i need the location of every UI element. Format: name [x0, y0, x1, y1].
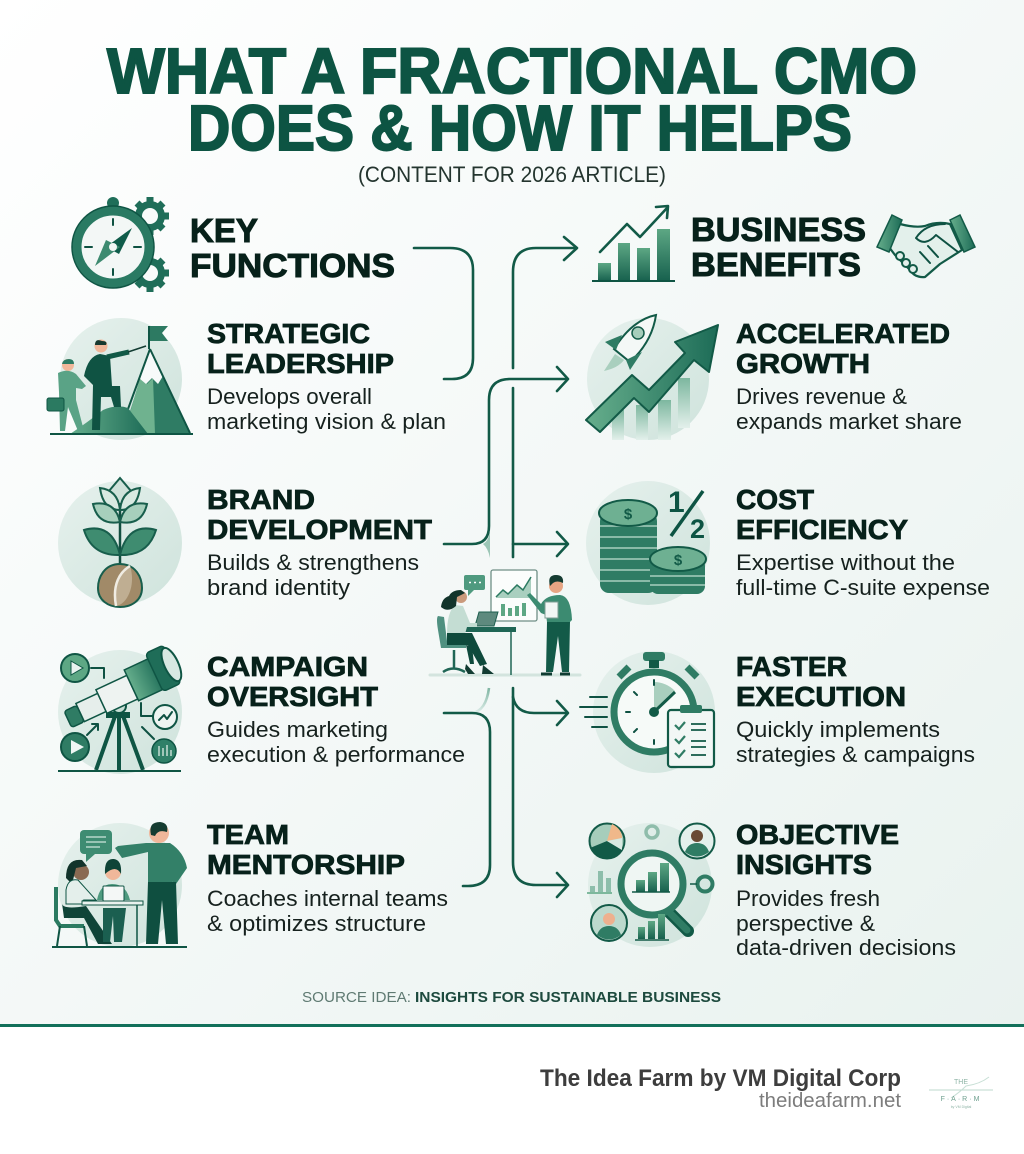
source line: INSIGHTS FOR SUSTAINABLE BUSINESS — [415, 990, 721, 1006]
description: expands market share — [736, 409, 962, 434]
description — [207, 717, 465, 767]
description: Coaches internal teams — [207, 886, 448, 911]
description — [736, 550, 990, 600]
heading: BRAND — [207, 484, 315, 515]
heading: OBJECTIVE — [736, 819, 899, 850]
heading: EXECUTION — [736, 681, 906, 712]
icon: rocket and rising arrow — [586, 315, 718, 440]
description: Drives revenue & — [736, 384, 907, 409]
panel: objective insights — [587, 819, 956, 960]
subtitle: (CONTENT FOR 2026 ARTICLE) — [358, 162, 666, 187]
icon: growth chart — [592, 206, 675, 281]
icon: stopwatch and checklist — [580, 651, 715, 773]
icon: coin stacks with one half: $ — [624, 506, 633, 523]
title: WHAT A FRACTIONAL CMO — [107, 35, 917, 107]
heading: OVERSIGHT — [207, 681, 378, 712]
heading: business benefits — [592, 206, 975, 283]
heading: TEAM — [207, 819, 289, 850]
description: Expertise without the — [736, 550, 955, 575]
footer brand text: The Idea Farm by VM Digital Corp — [540, 1065, 901, 1092]
panel: cost efficiency — [586, 481, 990, 605]
description — [207, 550, 419, 600]
description: Guides marketing — [207, 717, 388, 742]
heading text — [190, 212, 395, 284]
heading: MENTORSHIP — [207, 849, 405, 880]
panel: brand development — [58, 478, 432, 607]
flow connectors — [414, 237, 577, 897]
description: data-driven decisions — [736, 935, 956, 960]
description: full-time C-suite expense — [736, 575, 990, 600]
icon: magnifier and data — [587, 823, 714, 947]
title — [107, 35, 917, 164]
panel: team mentorship — [52, 819, 448, 947]
source line — [302, 990, 721, 1006]
heading — [736, 819, 899, 880]
description: execution & performance — [207, 742, 465, 767]
description: marketing vision & plan — [207, 409, 446, 434]
heading — [207, 318, 394, 379]
panel: accelerated growth — [586, 315, 962, 440]
heading: STRATEGIC — [207, 318, 370, 349]
heading — [207, 819, 405, 880]
icon: coin stacks with one half: 1 — [668, 486, 685, 519]
footer divider — [0, 1024, 1024, 1027]
description: brand identity — [207, 575, 350, 600]
heading text: BENEFITS — [691, 246, 861, 283]
footer logo: F·A·R·M — [941, 1096, 981, 1103]
heading text: KEY — [190, 212, 258, 249]
icon: coin stacks with one half: 2 — [690, 514, 705, 544]
description: Develops overall — [207, 384, 372, 409]
description — [736, 886, 956, 960]
center illustration: team at work — [430, 570, 580, 675]
footer brand text — [540, 1065, 901, 1112]
icon: coin stacks with one half — [586, 481, 710, 605]
heading: COST — [736, 484, 814, 515]
heading — [736, 318, 950, 379]
heading: DEVELOPMENT — [207, 514, 432, 545]
heading — [207, 651, 378, 712]
icon: mentor and team — [52, 822, 187, 947]
footer brand text: theideafarm.net — [759, 1090, 901, 1112]
description — [207, 384, 446, 434]
icon: climbing the mountain — [47, 318, 193, 440]
heading: CAMPAIGN — [207, 651, 368, 682]
heading: GROWTH — [736, 348, 870, 379]
heading: LEADERSHIP — [207, 348, 394, 379]
heading — [736, 651, 906, 712]
icon: compass with gears — [72, 197, 169, 292]
description — [736, 717, 975, 767]
heading: FASTER — [736, 651, 847, 682]
heading text — [691, 211, 866, 283]
footer logo — [929, 1077, 993, 1109]
heading: EFFICIENCY — [736, 514, 908, 545]
description: & optimizes structure — [207, 911, 426, 936]
heading text: BUSINESS — [691, 211, 866, 248]
source line: SOURCE IDEA: — [302, 990, 411, 1006]
description — [736, 384, 962, 434]
man presenting — [527, 575, 572, 674]
heading text: FUNCTIONS — [190, 247, 395, 284]
icon: handshake — [877, 215, 975, 277]
heading — [207, 484, 432, 545]
icon: telescope — [56, 643, 187, 774]
woman at desk — [437, 590, 516, 675]
footer logo: THE — [954, 1079, 968, 1086]
description: strategies & campaigns — [736, 742, 975, 767]
heading: INSIGHTS — [736, 849, 872, 880]
icon: coin stacks with one half: $ — [674, 552, 683, 569]
icon: sprouting plant — [58, 478, 182, 607]
footer logo: by VM Digital — [951, 1105, 972, 1109]
description: perspective & — [736, 911, 875, 936]
presentation board — [491, 570, 537, 621]
description: Builds & strengthens — [207, 550, 419, 575]
heading: key functions — [72, 197, 395, 292]
speech bubble — [464, 575, 485, 596]
heading — [736, 484, 908, 545]
title: DOES & HOW IT HELPS — [188, 92, 852, 164]
description: Quickly implements — [736, 717, 940, 742]
description: Provides fresh — [736, 886, 880, 911]
heading: ACCELERATED — [736, 318, 950, 349]
description — [207, 886, 448, 936]
panel: strategic leadership — [47, 318, 446, 440]
panel: campaign oversight — [56, 643, 465, 774]
panel: faster execution — [580, 651, 975, 773]
